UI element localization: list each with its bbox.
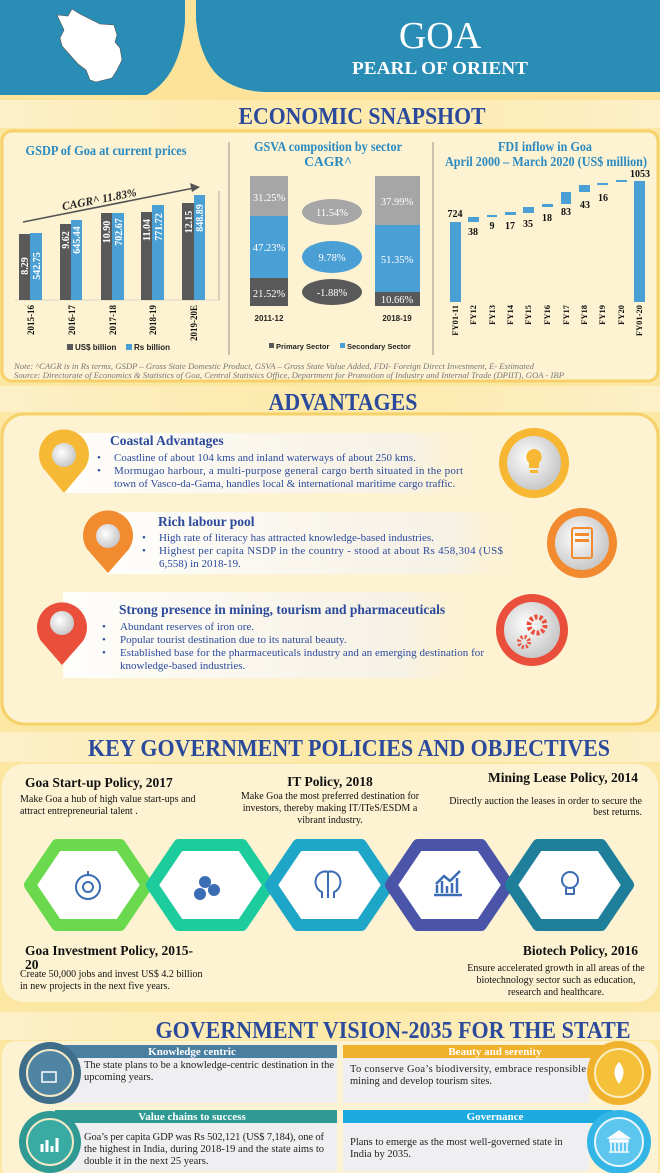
policy: biotech: research and healthcare. xyxy=(508,987,604,998)
chart: GSDP xyxy=(15,143,219,352)
advantage: mining tourism pharma: • xyxy=(102,647,106,659)
policy: IT: vibrant industry. xyxy=(297,815,363,826)
chart: FDI inflow: 43 xyxy=(580,200,590,211)
legend: Primary Sector xyxy=(276,342,329,351)
title: GOA xyxy=(399,15,482,57)
policy: investment: Create 50,000 jobs and invest US$ 4.2 billion xyxy=(20,969,202,980)
policy: mining lease: Mining Lease Policy, 2014 xyxy=(488,770,638,785)
card: value chains: double it in the next 25 years. xyxy=(84,1156,209,1167)
legend xyxy=(67,343,170,352)
chart: FDI inflow: 1053 xyxy=(630,169,650,180)
chart: GSVA composition: 11.54% xyxy=(316,208,348,219)
policy: biotech: Ensure accelerated growth in all areas of the xyxy=(467,963,645,974)
card: value chains: the highest in India, during 2018-19 and the state aims to xyxy=(84,1144,324,1155)
card: governance: Governance xyxy=(467,1111,524,1123)
notes xyxy=(13,362,564,380)
advantage: labour pool xyxy=(83,508,617,578)
chart: FDI inflow: FY01-11 xyxy=(450,305,460,336)
chart: FDI inflow: FY16 xyxy=(542,305,552,325)
panel: policies xyxy=(2,764,658,1002)
advantage: mining tourism pharma: • xyxy=(102,621,106,633)
chart: GSDP: 2019-20E xyxy=(189,305,199,341)
advantage: labour pool: 6,558) in 2018-19. xyxy=(159,558,241,570)
notes: Source: Directorate of Economics & Statistics of Goa, Central Statistics Office, Department for Promotion of Industry and Internal Trade (DPIIT), GOA - IBP xyxy=(14,371,564,380)
card: knowledge centric: upcoming years. xyxy=(84,1072,153,1083)
advantage: labour pool: Rich labour pool xyxy=(158,514,255,529)
card: knowledge centric: The state plans to be a knowledge-centric destination in the xyxy=(84,1060,334,1071)
chart: GSDP: 702.67 xyxy=(114,218,125,246)
icon: stopwatch gear xyxy=(76,871,100,899)
advantage: coastal: town of Vasco-da-Gama, handles local & international maritime cargo traffic. xyxy=(114,478,455,490)
chart: FDI inflow: 17 xyxy=(505,221,515,232)
advantage: coastal: Coastal Advantages xyxy=(110,433,224,448)
policy: investment: 20 xyxy=(25,957,39,972)
chart: GSDP: 848.89 xyxy=(195,204,206,232)
heading: economic snapshot: ECONOMIC SNAPSHOT xyxy=(238,104,486,130)
card: governance xyxy=(343,1110,651,1173)
chart: FDI inflow: FY14 xyxy=(505,304,515,325)
policy: IT: investors, thereby making IT/ITeS/ESDM a xyxy=(243,803,418,814)
card: governance: Plans to emerge as the most well-governed state in xyxy=(350,1137,563,1148)
chart: FDI inflow: 16 xyxy=(598,193,608,204)
chart: GSDP: 9.62 xyxy=(61,231,72,249)
card: value chains: Value chains to success xyxy=(138,1111,246,1123)
advantage: mining tourism pharma xyxy=(37,592,568,678)
policy: start-up: attract entrepreneurial talent . xyxy=(20,806,138,817)
chart: GSDP: GSDP of Goa at current prices xyxy=(26,143,186,158)
notes: Note: ^CAGR is in Rs terms, GSDP – Gross State Domestic Product, GSVA – Gross State Value Added, FDI- Foreign Direct Investment, E- Estimated xyxy=(13,362,535,371)
chart: GSVA composition: GSVA composition by sector xyxy=(254,139,402,154)
policy: biotech xyxy=(467,943,645,998)
chart: FDI inflow: FY20 xyxy=(616,305,626,325)
icon: two heads xyxy=(316,871,340,898)
legend: US$ billion xyxy=(75,343,116,352)
chart: GSDP: 8.29 xyxy=(20,257,31,275)
advantage: labour pool: High rate of literacy has attracted knowledge-based industries. xyxy=(159,532,434,544)
heading: key government policies: KEY GOVERNMENT POLICIES AND OBJECTIVES xyxy=(88,736,610,762)
chart: FDI inflow: 724 xyxy=(448,209,462,220)
chart: GSVA composition: 9.78% xyxy=(318,253,346,264)
chart: GSVA composition: 51.35% xyxy=(381,255,413,266)
icon: red pin xyxy=(37,602,87,665)
chart: FDI inflow: 35 xyxy=(523,219,533,230)
policy: mining lease xyxy=(449,770,643,818)
icon: tablet circle xyxy=(547,508,617,578)
heading: advantages xyxy=(0,386,660,416)
chart: FDI inflow: 38 xyxy=(468,227,478,238)
chart: FDI inflow: FY18 xyxy=(579,305,589,325)
icon: map of Goa xyxy=(57,9,122,82)
advantage: mining tourism pharma: • xyxy=(102,634,106,646)
chart: GSDP: 2015-16 xyxy=(26,305,36,335)
advantage: coastal: Mormugao harbour, a multi-purpose general cargo berth situated in the port xyxy=(114,465,463,477)
chart: GSDP: 2016-17 xyxy=(67,305,77,335)
chart: FDI inflow: FY19 xyxy=(597,305,607,325)
chart: FDI inflow: FY12 xyxy=(468,305,478,325)
advantage: coastal: • xyxy=(97,452,101,464)
policy: investment: in new projects in the next five years. xyxy=(20,981,170,992)
chart: GSVA composition xyxy=(250,139,420,351)
icon: orange pin xyxy=(83,510,133,573)
card: beauty and serenity: Beauty and serenity xyxy=(448,1046,542,1058)
card: governance: India by 2035. xyxy=(350,1149,411,1160)
policy: start-up: Make Goa a hub of high value start-ups and xyxy=(20,794,196,805)
chart: GSVA composition: 31.25% xyxy=(253,193,285,204)
chart: GSVA composition: 21.52% xyxy=(253,289,285,300)
advantage: coastal: Coastline of about 104 kms and inland waterways of about 250 kms. xyxy=(114,452,416,464)
card: beauty and serenity xyxy=(343,1041,651,1105)
chart: GSDP: 11.04 xyxy=(142,219,153,241)
chart: GSDP: 542.75 xyxy=(32,252,43,280)
advantage: mining tourism pharma: knowledge-based industries. xyxy=(120,660,245,672)
subtitle: PEARL OF ORIENT xyxy=(352,58,528,78)
icon: question marks xyxy=(194,876,220,900)
legend xyxy=(269,342,411,351)
legend: Secondary Sector xyxy=(347,342,411,351)
advantage: mining tourism pharma: Popular tourist destination due to its natural beauty. xyxy=(120,634,347,646)
policy: start-up xyxy=(20,775,196,817)
chart: FDI inflow: FY01-20 xyxy=(634,305,644,336)
advantage: coastal: • xyxy=(97,465,101,477)
chart: GSVA composition: 2011-12 xyxy=(255,314,284,323)
chart: FDI inflow: FY13 xyxy=(487,305,497,325)
chart: FDI inflow: 9 xyxy=(490,221,494,232)
chart: GSVA composition: 37.99% xyxy=(381,197,413,208)
panel: vision xyxy=(2,1041,658,1173)
policy: investment: Goa Investment Policy, 2015- xyxy=(25,943,193,958)
policy: IT: Make Goa the most preferred destination for xyxy=(241,791,420,802)
heading: advantages: ADVANTAGES xyxy=(268,390,418,416)
chart: GSDP: 10.90 xyxy=(102,221,113,243)
card: beauty and serenity: mining and develop tourism sites. xyxy=(350,1076,492,1087)
policy: biotech: Biotech Policy, 2016 xyxy=(523,943,638,958)
card: value chains: Goa’s per capita GDP was Rs 502,121 (US$ 7,184), one of xyxy=(84,1132,324,1143)
arrow: CAGR xyxy=(23,183,200,222)
heading: vision 2035: GOVERNMENT VISION-2035 FOR THE STATE xyxy=(156,1018,630,1044)
chart: GSVA composition: CAGR^ xyxy=(304,154,352,169)
advantage: labour pool: • xyxy=(142,532,146,544)
icon: yellow pin xyxy=(39,429,89,493)
advantage: labour pool: Highest per capita NSDP in the country - stood at about Rs 458,304 (US$ xyxy=(159,545,504,557)
policy: IT: IT Policy, 2018 xyxy=(287,774,373,789)
chart: GSDP: 2018-19 xyxy=(148,305,158,335)
advantage: mining tourism pharma: Established base for the pharmaceuticals industry and an emerging destination for xyxy=(120,647,484,659)
advantage: mining tourism pharma: Strong presence in mining, tourism and pharmaceuticals xyxy=(119,602,445,617)
icon: lightbulb circle xyxy=(499,428,569,498)
header banner xyxy=(0,0,660,100)
icon: chart xyxy=(434,871,462,895)
arrow: CAGR: CAGR^ 11.83% xyxy=(61,187,138,213)
hexagon chain xyxy=(30,845,628,925)
chart: GSDP: 645.44 xyxy=(72,226,83,254)
card: beauty and serenity: To conserve Goa’s biodiversity, embrace responsible xyxy=(350,1064,586,1075)
chart: GSDP: 771.72 xyxy=(154,213,165,241)
policy: start-up: Goa Start-up Policy, 2017 xyxy=(25,775,173,790)
chart: GSVA composition: 47.23% xyxy=(253,243,285,254)
policy: biotech: biotechnology sector such as education, xyxy=(476,975,636,986)
policy: IT xyxy=(241,774,420,826)
chart: GSVA composition: 2018-19 xyxy=(382,314,412,323)
heading: economic snapshot xyxy=(0,100,660,130)
advantage: mining tourism pharma: Abundant reserves of iron ore. xyxy=(120,621,254,633)
advantage: coastal xyxy=(39,428,569,498)
policy: mining lease: Directly auction the leases in order to secure the xyxy=(449,796,643,807)
chart: FDI inflow xyxy=(445,139,650,336)
chart: GSVA composition: -1.88% xyxy=(317,288,348,299)
icon: bulb xyxy=(562,872,578,894)
advantage: labour pool: • xyxy=(142,545,146,557)
policy: investment xyxy=(20,943,202,992)
chart: FDI inflow: 83 xyxy=(561,207,571,218)
chart: FDI inflow: FY15 xyxy=(523,305,533,325)
chart: FDI inflow: 18 xyxy=(542,213,552,224)
chart: GSVA composition: 10.66% xyxy=(381,295,413,306)
chart: GSDP: 2017-18 xyxy=(108,305,118,335)
legend: Rs billion xyxy=(134,343,170,352)
card: knowledge centric xyxy=(19,1042,337,1104)
card: value chains xyxy=(19,1110,337,1173)
heading: vision 2035 xyxy=(0,1012,660,1044)
chart: GSDP: 12.15 xyxy=(184,211,195,233)
chart: FDI inflow: FDI inflow in Goa xyxy=(498,139,592,154)
policy: mining lease: best returns. xyxy=(593,807,642,818)
panel: economic snapshot xyxy=(2,131,658,381)
panel: advantages xyxy=(2,414,658,724)
chart: FDI inflow: FY17 xyxy=(561,304,571,325)
card: knowledge centric: Knowledge centric xyxy=(148,1046,236,1058)
icon: gears circle xyxy=(496,594,568,666)
